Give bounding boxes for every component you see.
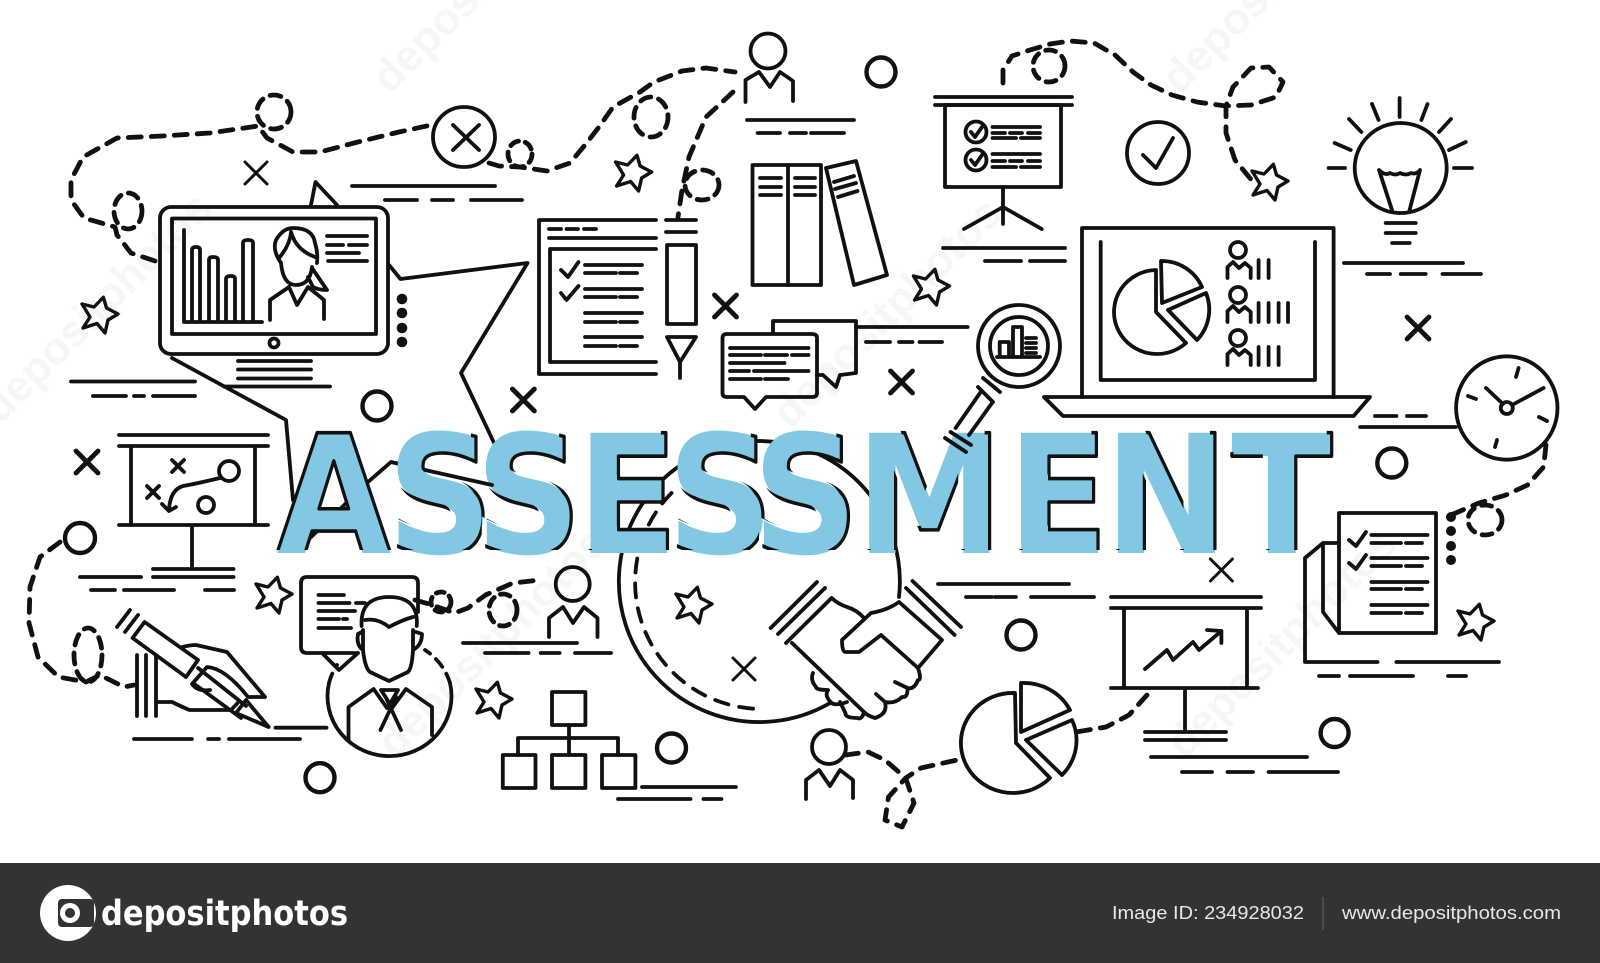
title: ASSESSMENT: ASSESSMENT [276, 401, 1332, 593]
watermark [0, 0, 1406, 767]
small x marks [76, 162, 1429, 680]
icon: pencil [666, 220, 696, 378]
stand lines [224, 361, 330, 386]
lines above form [352, 186, 522, 200]
icon: speech bubbles [722, 321, 968, 409]
head [358, 597, 422, 681]
circle outline [328, 683, 452, 756]
bar chart on monitor [184, 230, 262, 322]
dashed path: bubble to person [415, 580, 540, 626]
people list [1228, 242, 1288, 365]
large circle behind handshake [619, 441, 900, 722]
icon: checklist form [539, 220, 656, 374]
stars [82, 155, 1494, 718]
lines under monitor [71, 382, 195, 396]
pie chart [1114, 261, 1209, 354]
form lines [585, 265, 642, 346]
shoulders and tie [348, 689, 432, 740]
lines above growth board [938, 584, 1094, 597]
icon: growth board [1111, 597, 1338, 772]
title: ASSESSMENT [276, 430, 1334, 556]
watermark: depositphotos [367, 518, 616, 767]
presenter figure [270, 228, 327, 320]
icon: person bottom [806, 730, 853, 799]
icon: pie chart [961, 683, 1077, 793]
icon: hand writing [117, 610, 326, 739]
dashed path: lower left route [29, 523, 134, 687]
small circles [306, 58, 1406, 792]
dashed path: top left route [71, 68, 735, 261]
icon: check circle [1127, 122, 1189, 184]
dashed path: top right route [1003, 41, 1283, 183]
watermark: depositphotos [1157, 518, 1406, 767]
icon: laptop with pie chart [1044, 228, 1370, 416]
footer bar [0, 863, 1600, 963]
icon: light bulb [1329, 98, 1481, 274]
icon: magnifier [945, 305, 1060, 452]
dashed inner ring [635, 493, 761, 709]
dashed path: pie to board [1078, 695, 1147, 732]
monitor button [270, 338, 278, 348]
star line crossing title [425, 470, 492, 485]
icon: organisation chart [503, 692, 736, 799]
logo: camera [40, 885, 96, 941]
icon: person top [746, 34, 854, 133]
watermark: depositphotos [762, 188, 1011, 437]
icon: presentation board with checks [935, 97, 1072, 261]
website: www.depositphotos.com [1341, 903, 1561, 923]
icon: clock [1360, 356, 1558, 460]
checkmarks [561, 262, 578, 300]
icon: checklist document [1305, 512, 1499, 676]
icon: handshake [771, 581, 961, 718]
large star outline behind title [172, 182, 528, 542]
dashed path: person to pie chart [845, 752, 957, 827]
dots [397, 294, 407, 347]
icon: man with speech bubble [301, 577, 452, 756]
icon: binders [752, 161, 887, 285]
brand name: depositphotos [101, 894, 348, 934]
dashed path: clock to document [1451, 445, 1546, 535]
icon: tactics board [80, 435, 268, 590]
divider [1322, 897, 1324, 930]
speech bubble [301, 577, 418, 670]
title: ASSESSMENT: ASSESSMENT [276, 401, 1332, 593]
icon: person lower left [463, 567, 611, 653]
text lines on monitor [327, 236, 367, 261]
icon: X in circle [433, 107, 495, 167]
icon: monitor with presenter [160, 207, 407, 386]
image id: Image ID: 234928032 [1112, 903, 1304, 923]
solid ring [619, 441, 900, 722]
